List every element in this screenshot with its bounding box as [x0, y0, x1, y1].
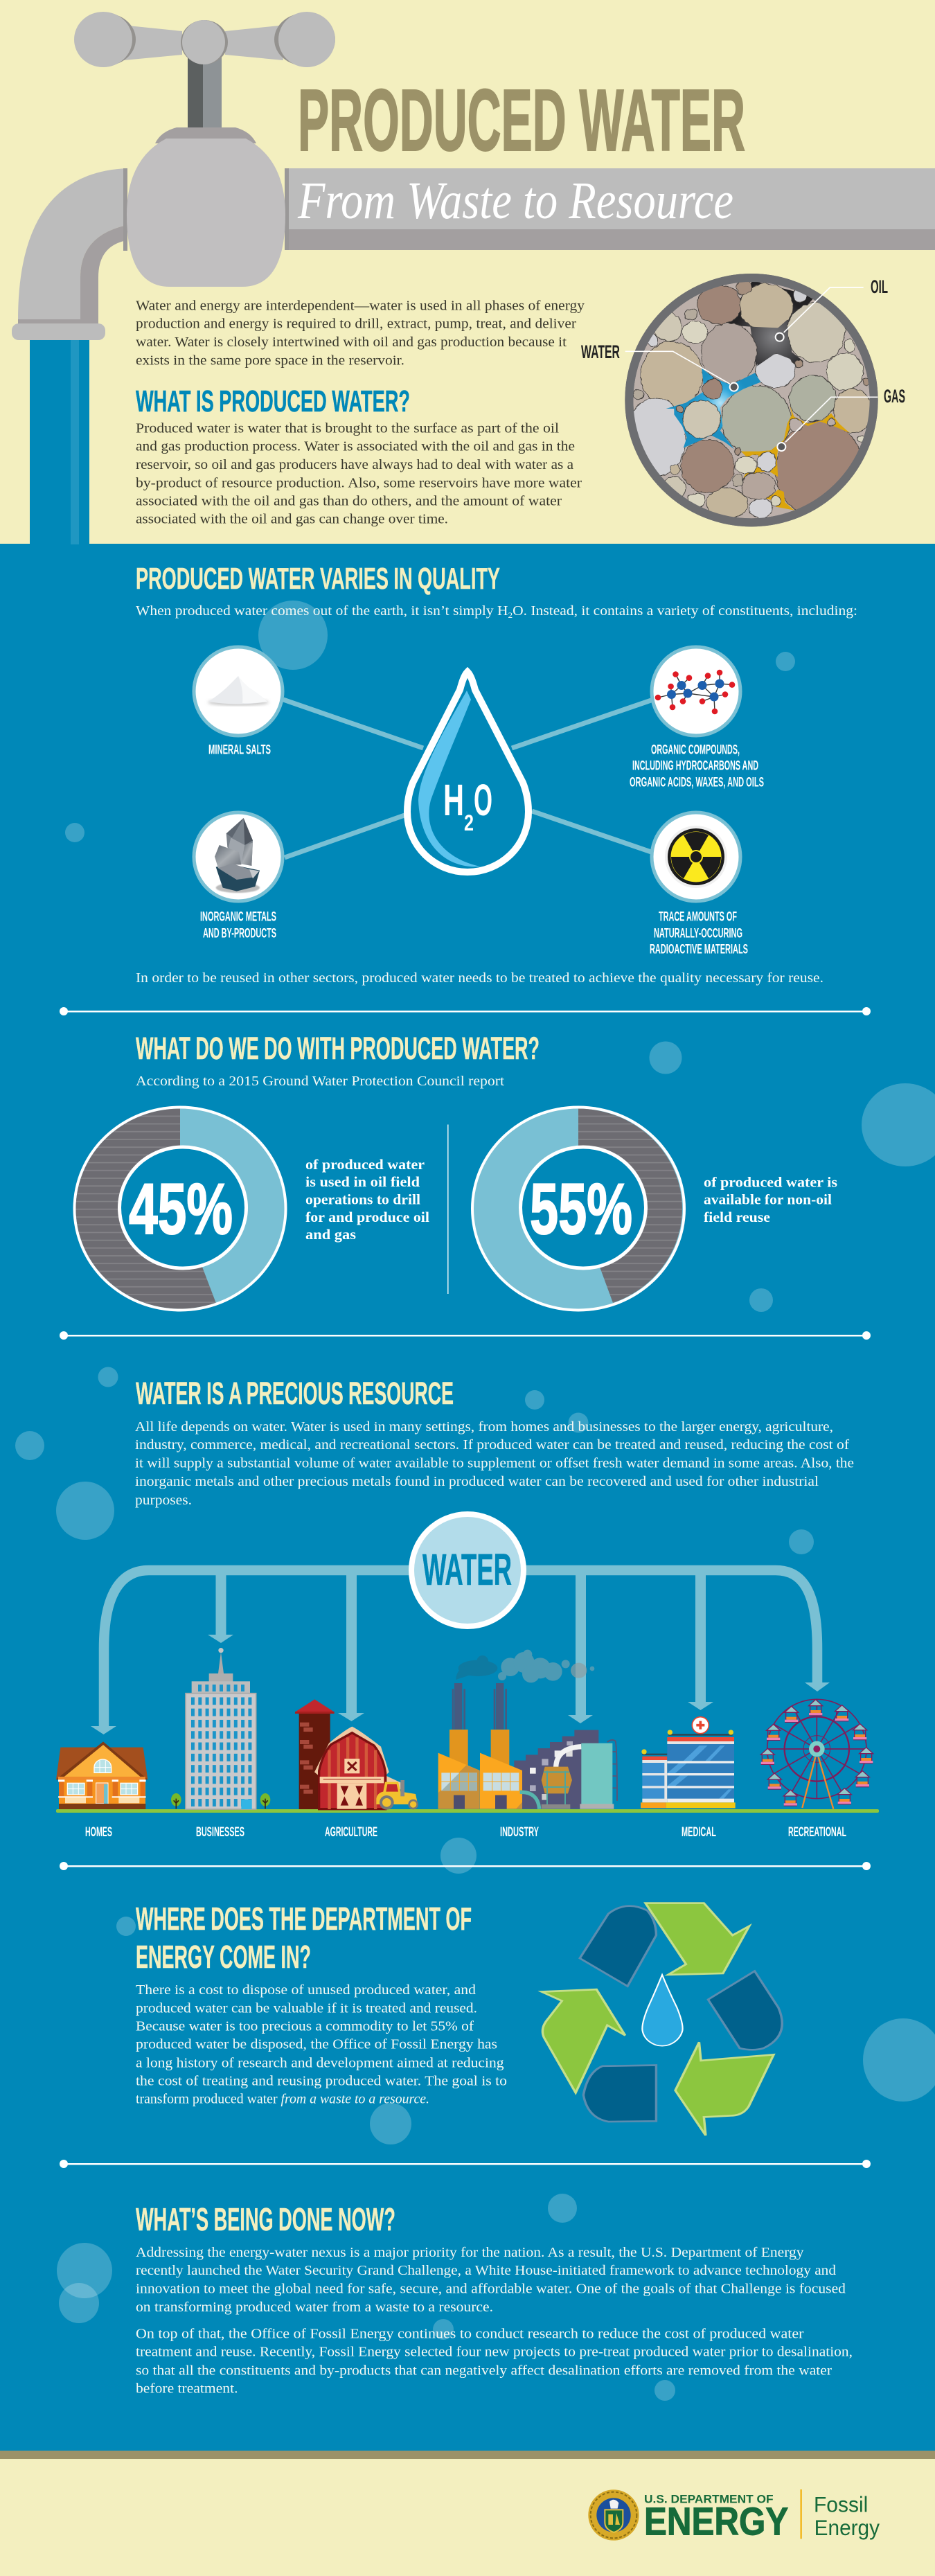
intro text: Water and energy are interdependent—water is used in all phases of energy	[136, 299, 585, 313]
description: 45 percent	[305, 1156, 429, 1243]
definition text: reservoir, so oil and gas producers have always had to deal with water as a	[136, 458, 573, 472]
icon: house	[56, 1741, 148, 1809]
department of energy text: transform produced water from a waste to a resource.	[136, 2092, 429, 2107]
label: organic compounds: ORGANIC COMPOUNDS,	[651, 743, 740, 758]
icon: mineral salts	[194, 647, 283, 736]
heading: varies in quality: PRODUCED WATER VARIES IN QUALITY	[136, 562, 500, 596]
label: organic compounds: INCLUDING HYDROCARBONS AND	[632, 759, 758, 773]
icon: H2O water drop: 2	[464, 810, 474, 835]
label: inorganic metals: INORGANIC METALS	[200, 910, 276, 924]
heading: where does the department of energy come in	[136, 1901, 472, 1975]
connector lines	[283, 700, 653, 858]
being done text: before treatment.	[136, 2381, 238, 2397]
logo: U.S. Department of Energy, Fossil Energy: Energy	[814, 2516, 880, 2540]
department of energy text: a long history of research and development aimed at reducing	[136, 2056, 504, 2071]
subtitle: From Waste to Resource	[297, 172, 733, 230]
panel: what do we do with produced water	[73, 1031, 837, 1312]
decorative bubbles	[15, 601, 935, 2401]
definition text: Produced water is water that is brought to the surface as part of the oil	[136, 421, 560, 436]
intro text	[136, 299, 585, 368]
definition text: and gas production process. Water is associated with the oil and gas in the	[136, 439, 575, 454]
quality closing text: In order to be reused in other sectors, produced water needs to be treated to achieve the quality necessary for reuse.	[136, 971, 823, 986]
heading: what do we do: WHAT DO WE DO WITH PRODUCED WATER?	[136, 1031, 540, 1066]
donut chart: 55 percent	[471, 1105, 686, 1312]
icon: factory	[438, 1650, 617, 1809]
precious resource text	[135, 1420, 854, 1508]
description: 45 percent: is used in oil field	[305, 1173, 420, 1190]
quality intro text: When produced water comes out of the earth, it isn’t simply H	[136, 604, 473, 619]
label: trace radioactive materials: NATURALLY-OCCURING	[654, 927, 742, 941]
being done text: innovation to meet the global need for safe, secure, and affordable water. One of the goals of that Challenge is focused	[136, 2282, 846, 2297]
sector labels	[85, 1825, 846, 1840]
label: trace radioactive materials	[650, 910, 748, 957]
department of energy text	[136, 1983, 507, 2107]
donut chart: 45 percent: 45%	[129, 1169, 233, 1250]
label: trace radioactive materials: RADIOACTIVE MATERIALS	[650, 942, 748, 957]
label: inorganic metals	[200, 910, 276, 941]
label: gas: GAS	[884, 386, 905, 407]
heading: where does the department of energy come in: ENERGY COME IN?	[136, 1939, 311, 1975]
sector labels: RECREATIONAL	[788, 1825, 846, 1840]
being done text: Addressing the energy-water nexus is a major priority for the nation. As a result, the U.S. Department of Energy	[136, 2246, 804, 2260]
description: 55 percent	[704, 1173, 837, 1225]
icon: H2O water drop: O	[474, 775, 492, 825]
definition text: associated with the oil and gas can change over time.	[136, 513, 448, 526]
water distribution pipes and arrows	[91, 1570, 830, 1734]
quality intro text: O. Instead, it contains a variety of constituents, including:	[513, 604, 857, 619]
precious resource text: purposes.	[135, 1493, 192, 1508]
icon: department seal	[588, 2489, 639, 2541]
donut chart: 45 percent	[73, 1105, 287, 1312]
panel: what's being done now	[136, 2201, 853, 2397]
icon: organic compounds molecule	[652, 647, 740, 736]
description: 45 percent: and gas	[305, 1226, 356, 1243]
department of energy text: produced water can be valuable if it is treated and reused.	[136, 2002, 477, 2016]
precious resource text: industry, commerce, medical, and recreational sectors. If produced water can be treated and reused, reducing the cost of	[135, 1438, 850, 1453]
being done text: so that all the constituents and by-products that can negatively affect desalination efforts are removed from the water	[136, 2363, 832, 2379]
heading: what's being done now: WHAT’S BEING DONE NOW?	[136, 2201, 395, 2237]
intro text: water. Water is closely intertwined with oil and gas production because it	[136, 335, 567, 350]
department of energy text: produced water be disposed, the Office of Fossil Energy has	[136, 2038, 497, 2052]
description: 45 percent: for and produce oil	[305, 1209, 429, 1225]
water hub circle	[409, 1511, 526, 1629]
reservoir diagram	[625, 278, 878, 522]
logo: U.S. Department of Energy, Fossil Energy: Fossil	[814, 2493, 868, 2517]
header background	[0, 0, 935, 544]
logo: U.S. Department of Energy, Fossil Energy: ENERGY	[644, 2501, 788, 2544]
logo: U.S. Department of Energy, Fossil Energy: U.S. DEPARTMENT OF	[644, 2493, 774, 2505]
definition text: associated with the oil and gas than do others, and the amount of water	[136, 495, 562, 508]
label: organic compounds: ORGANIC ACIDS, WAXES, AND OILS	[630, 776, 764, 790]
description: 45 percent: of produced water	[305, 1156, 425, 1173]
department of energy text: There is a cost to dispose of unused produced water, and	[136, 1983, 476, 1998]
ground line	[56, 1809, 879, 1813]
being done text	[136, 2246, 853, 2397]
icon: inorganic metals rock	[194, 812, 283, 901]
water hub circle: WATER	[422, 1545, 512, 1595]
label: inorganic metals: AND BY-PRODUCTS	[203, 927, 276, 941]
precious resource text: inorganic metals and other precious metals found in produced water can be recovered and used for other industrial	[135, 1475, 819, 1489]
being done text: treatment and reuse. Recently, Fossil Energy selected four new projects to pre-treat produced water prior to desalination,	[136, 2345, 853, 2359]
blue main background	[0, 544, 935, 2451]
description: 55 percent: field reuse	[704, 1209, 770, 1225]
icon: H2O water drop: H	[443, 775, 464, 825]
icon: recycling arrows with water drop	[542, 1903, 782, 2135]
icon: ferris wheel	[760, 1699, 873, 1809]
heading: what is produced water: WHAT IS PRODUCED WATER?	[136, 384, 410, 418]
precious resource text: All life depends on water. Water is used in many settings, from homes and businesses to the larger energy, agriculture,	[135, 1420, 833, 1434]
panel: water quality	[136, 562, 857, 986]
description: 55 percent: of produced water is	[704, 1173, 837, 1190]
icon: radioactive trefoil	[652, 812, 740, 901]
icon: office tower	[171, 1648, 270, 1809]
intro text: production and energy is required to drill, extract, pump, treat, and deliver	[136, 317, 577, 331]
icon: H2O water drop	[407, 672, 528, 872]
being done text: on transforming produced water from a waste to a resource.	[136, 2300, 493, 2315]
sector labels: BUSINESSES	[196, 1825, 244, 1840]
icon: faucet	[12, 12, 935, 544]
precious resource text: it will supply a substantial volume of water available to supplement or offset fresh water demand in some areas. Also, the	[135, 1456, 854, 1471]
icon: hospital	[641, 1717, 736, 1808]
label: organic compounds	[630, 743, 764, 790]
panel: department of energy role	[136, 1901, 782, 2135]
logo: U.S. Department of Energy, Fossil Energy	[588, 2489, 880, 2544]
definition text: by-product of resource production. Also, some reservoirs have more water	[136, 477, 582, 490]
label: oil: OIL	[871, 276, 888, 297]
label: water: WATER	[581, 341, 620, 362]
label: mineral salts: MINERAL SALTS	[208, 743, 271, 758]
department of energy text: the cost of treating and reusing produced water. The goal is to	[136, 2074, 507, 2089]
description: 55 percent: available for non-oil	[704, 1191, 832, 1208]
footer band	[0, 2451, 935, 2576]
heading: where does the department of energy come in: WHERE DOES THE DEPARTMENT OF	[136, 1901, 472, 1937]
heading: precious resource: WATER IS A PRECIOUS RESOURCE	[136, 1376, 454, 1411]
being done text: recently launched the Water Security Grand Challenge, a White House-initiated framework to advance technology and	[136, 2264, 836, 2278]
intro text: exists in the same pore space in the reservoir.	[136, 353, 404, 368]
description: 45 percent: operations to drill	[305, 1191, 420, 1208]
panel: water is a precious resource	[56, 1376, 879, 1840]
quality intro text: 2	[508, 610, 513, 620]
being done text: On top of that, the Office of Fossil Energy continues to conduct research to reduce the cost of produced water	[136, 2327, 804, 2341]
sector labels: MEDICAL	[682, 1825, 716, 1840]
label: trace radioactive materials: TRACE AMOUNTS OF	[659, 910, 737, 924]
sector labels: INDUSTRY	[500, 1825, 539, 1840]
sector labels: HOMES	[85, 1825, 112, 1840]
definition text	[136, 421, 582, 526]
donut chart: 55 percent: 55%	[530, 1169, 632, 1250]
department of energy text: Because water is too precious a commodity to let 55% of	[136, 2020, 474, 2034]
icon: barn and silo	[295, 1699, 418, 1810]
source note: According to a 2015 Ground Water Protection Council report	[136, 1074, 505, 1089]
sector labels: AGRICULTURE	[325, 1825, 377, 1840]
